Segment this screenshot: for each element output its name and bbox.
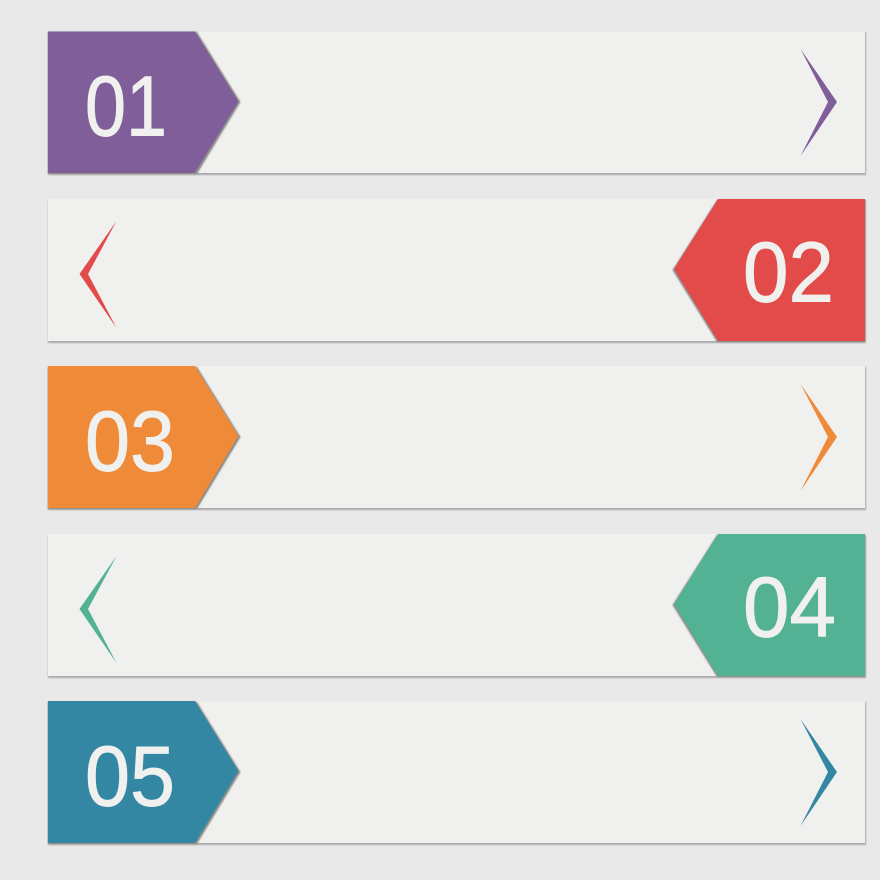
number: 02: 02 (743, 226, 834, 320)
badge: 01 (48, 32, 238, 173)
panel: banner 02 (48, 199, 866, 343)
number: 04: 04 (743, 560, 836, 656)
panel: banner 04 (48, 534, 866, 678)
arrow: right chevron orange (800, 384, 837, 491)
arrow: left chevron red (80, 221, 116, 328)
panel: banner 03 (48, 366, 866, 510)
badge: 03 (48, 366, 238, 508)
arrow: right chevron purple (800, 49, 837, 156)
number: 03: 03 (85, 394, 175, 490)
number: 01: 01 (85, 60, 167, 154)
badge: 04 (674, 534, 865, 676)
arrow: right chevron teal (800, 719, 837, 826)
panel: banner 01 (48, 32, 866, 175)
arrow: left chevron green (80, 556, 116, 663)
number: 05: 05 (85, 730, 175, 824)
panel: banner 05 (48, 701, 866, 845)
badge: 02 (674, 199, 865, 341)
badge: 05 (48, 701, 238, 843)
